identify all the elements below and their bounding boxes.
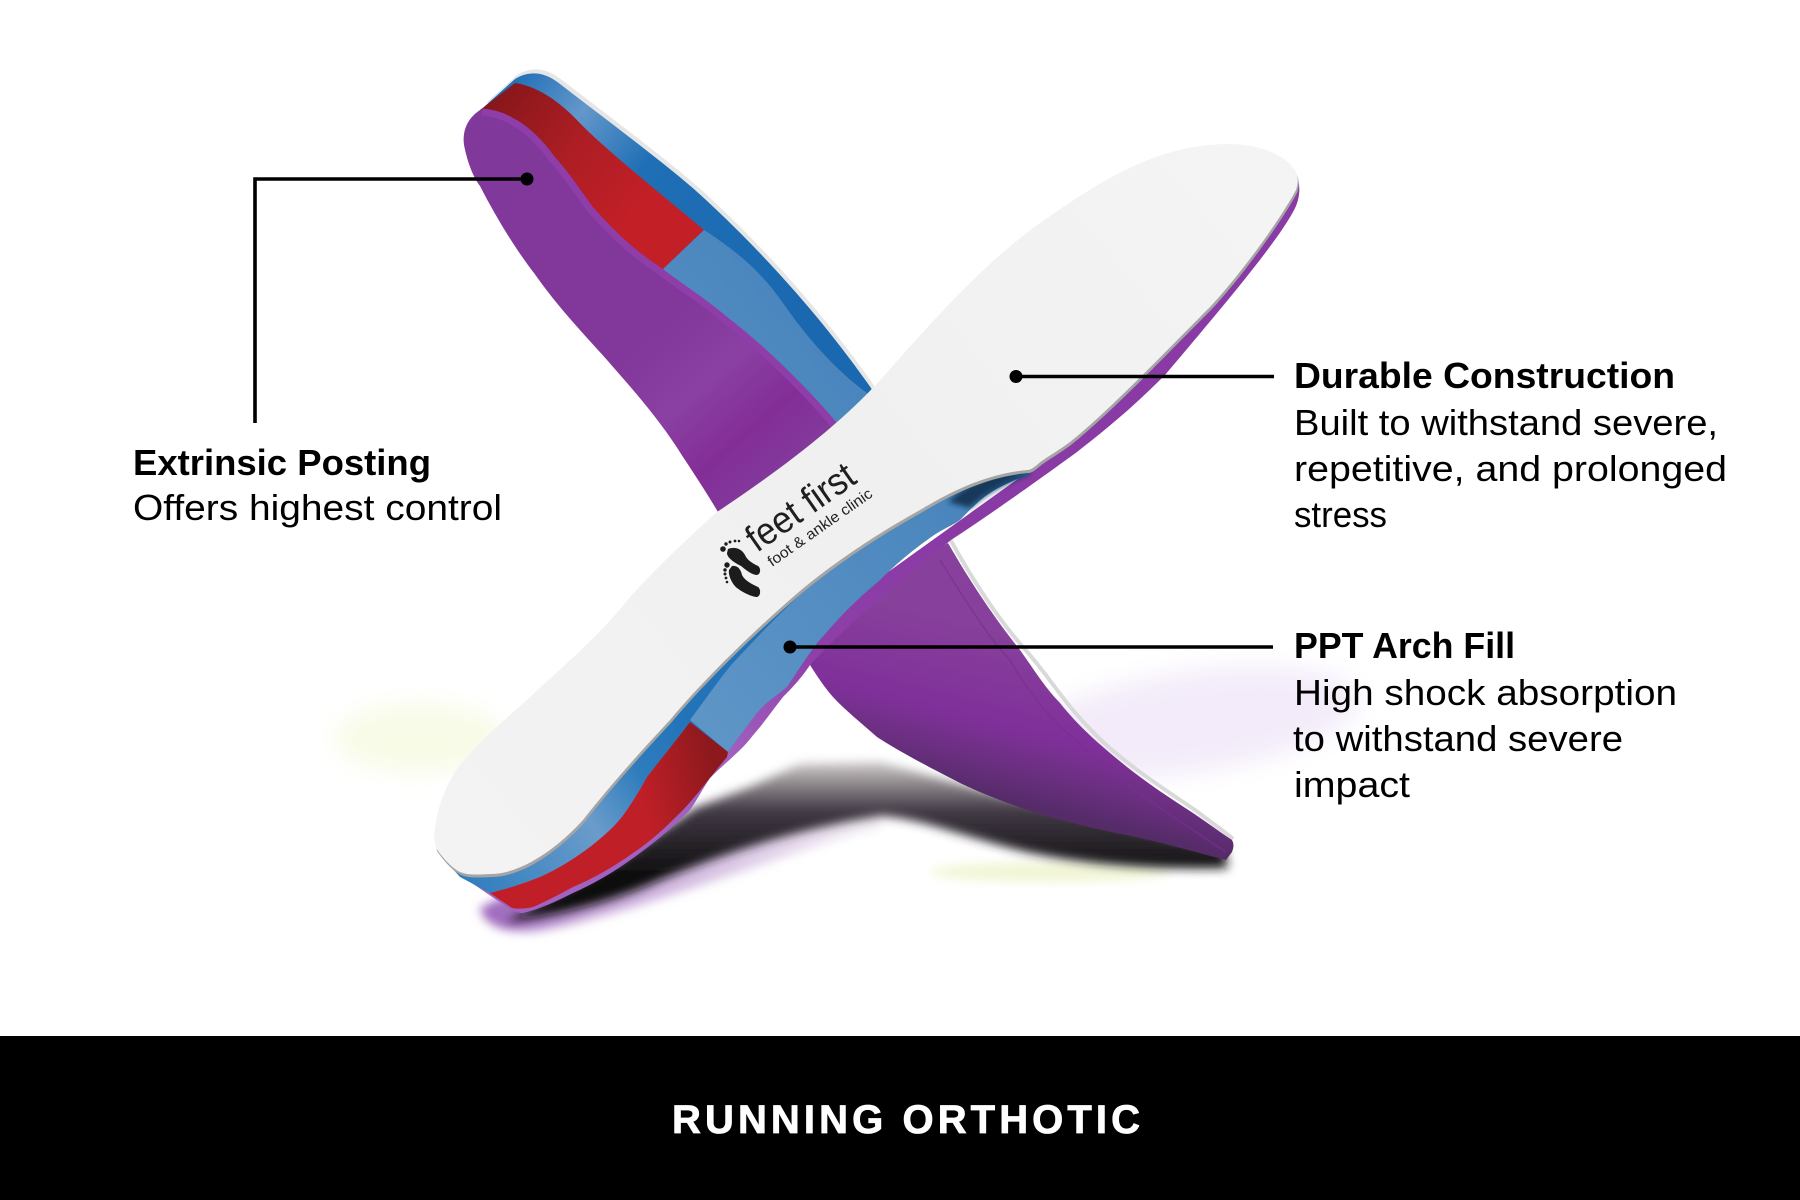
leader dot xyxy=(784,640,796,654)
insole 2: lower forefoot, purple underside xyxy=(810,539,1234,860)
callout: durable construction xyxy=(1010,355,1727,535)
insole 2: upper heel, layered side xyxy=(464,69,882,512)
logo wordmark: feet first xyxy=(738,455,864,560)
logo: feet first xyxy=(720,455,876,597)
insole 1: white top cover xyxy=(434,144,1298,875)
leader dot xyxy=(520,172,534,186)
description xyxy=(1293,672,1677,805)
callout: extrinsic posting xyxy=(133,172,534,528)
insole 1: light blue arch fill (PPT) xyxy=(690,470,1027,752)
background glows xyxy=(335,649,1365,882)
extrinsic post red wedge xyxy=(480,83,704,270)
leader line xyxy=(790,645,1273,649)
heading: PPT Arch Fill xyxy=(1294,625,1515,666)
description: repetitive, and prolonged xyxy=(1294,448,1727,489)
insole 1: dark shade at arch xyxy=(948,470,1030,508)
icon: footprints xyxy=(720,540,760,597)
insole 1: blue layer xyxy=(440,465,1030,893)
insole 1: purple shell edge xyxy=(463,172,1299,913)
purple shell xyxy=(464,100,850,512)
description: Built to withstand severe, xyxy=(1294,402,1718,443)
description: Offers highest control xyxy=(133,487,502,528)
purple flange highlight xyxy=(482,112,834,425)
insole 1: top cover shadow edge xyxy=(435,147,1299,878)
insole ground shadow xyxy=(480,762,1228,931)
leader line xyxy=(255,179,527,423)
leader dot xyxy=(1010,370,1022,383)
description: impact xyxy=(1294,764,1410,805)
callout: PPT arch fill xyxy=(784,625,1677,805)
heading: Extrinsic Posting xyxy=(133,442,431,483)
heading: Durable Construction xyxy=(1294,355,1675,396)
logo tagline: foot & ankle clinic xyxy=(765,485,876,570)
light blue arch fill xyxy=(662,230,880,435)
leader line xyxy=(1016,375,1274,378)
description: High shock absorption xyxy=(1294,672,1677,713)
footer title: RUNNING ORTHOTIC xyxy=(672,1098,1140,1142)
description: stress xyxy=(1294,494,1387,535)
description: to withstand severe xyxy=(1293,718,1623,759)
insole 1: red heel wedge xyxy=(490,722,728,909)
footer band xyxy=(0,1036,1800,1200)
blue layer xyxy=(485,73,880,435)
description xyxy=(1294,402,1727,535)
top cover edge xyxy=(487,69,882,431)
